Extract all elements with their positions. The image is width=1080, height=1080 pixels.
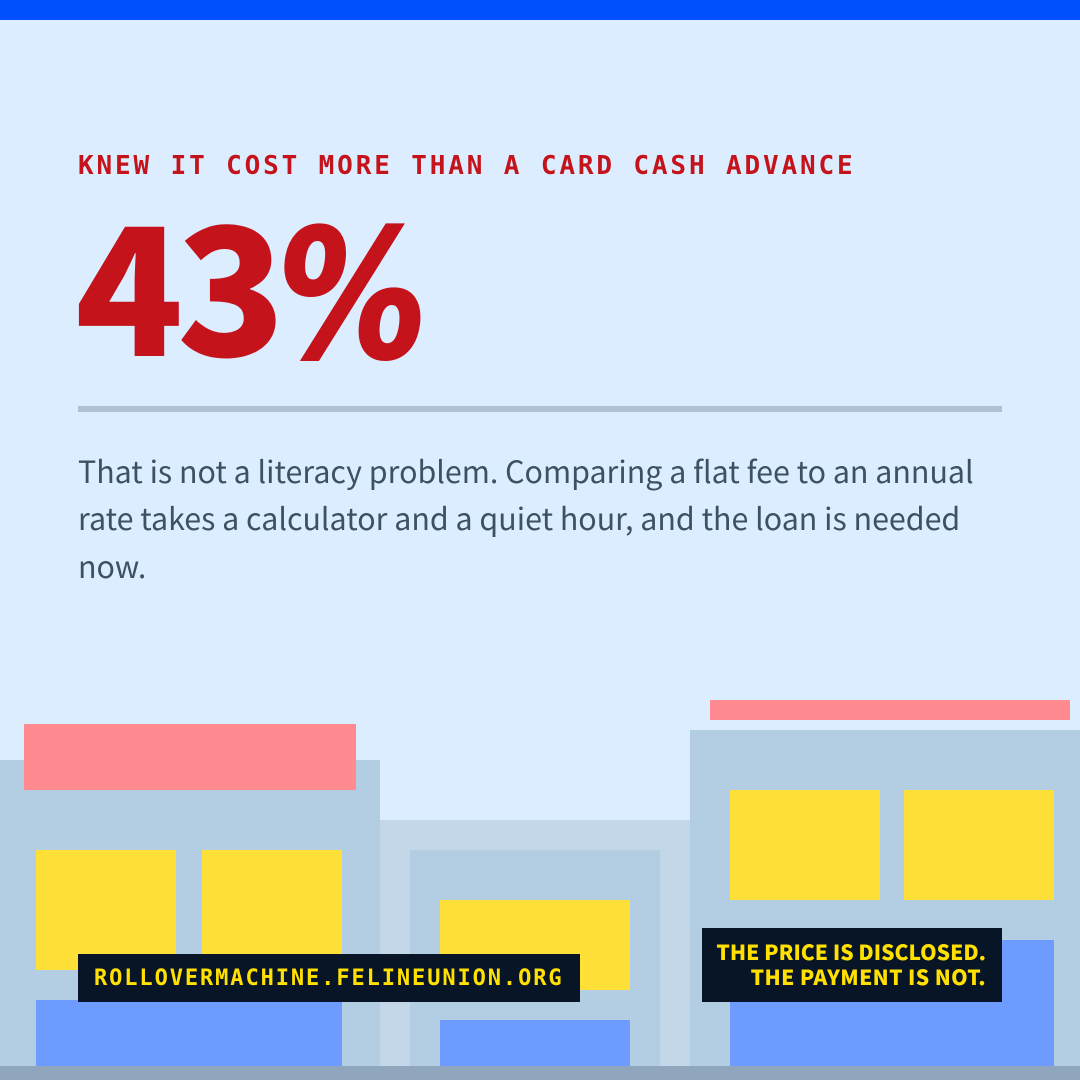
storefront illustration xyxy=(0,700,1080,1080)
big stat: 4 xyxy=(75,151,183,408)
tagline text: THE PRICE IS DISCLOSED. xyxy=(716,937,986,967)
big stat xyxy=(75,151,439,408)
ground strip xyxy=(0,1066,1080,1080)
window: left 2 xyxy=(202,850,342,970)
body text xyxy=(78,448,974,587)
window: right 2 xyxy=(904,790,1054,900)
tagline text: THE PAYMENT IS NOT. xyxy=(751,962,986,992)
body text: That is not a literacy problem. Comparing a flat fee to an annual xyxy=(78,448,974,492)
door: middle building xyxy=(440,1020,630,1080)
tagline callout xyxy=(702,928,1002,1002)
window: left 1 xyxy=(36,850,176,970)
divider xyxy=(78,406,1002,412)
url tag xyxy=(78,954,580,1002)
building: right xyxy=(690,730,1080,1080)
sign: left building xyxy=(24,724,356,790)
door: right building xyxy=(730,940,1054,1080)
body text: now. xyxy=(78,543,146,587)
tagline text xyxy=(716,937,986,992)
sign: right building xyxy=(710,700,1070,720)
big stat: 3 xyxy=(177,151,285,408)
top bar xyxy=(0,0,1080,20)
window: right 1 xyxy=(730,790,880,900)
door: left building xyxy=(36,1000,342,1080)
window: middle xyxy=(440,900,630,990)
big stat: % xyxy=(265,192,439,399)
building: left xyxy=(0,760,380,1080)
body text: rate takes a calculator and a quiet hour, and the loan is needed xyxy=(78,495,960,539)
inner panel: middle building xyxy=(410,850,660,1080)
url text: ROLLOVERMACHINE.FELINEUNION.ORG xyxy=(94,966,564,991)
building: middle xyxy=(380,820,690,1080)
eyebrow heading: KNEW IT COST MORE THAN A CARD CASH ADVANCE xyxy=(78,151,856,181)
